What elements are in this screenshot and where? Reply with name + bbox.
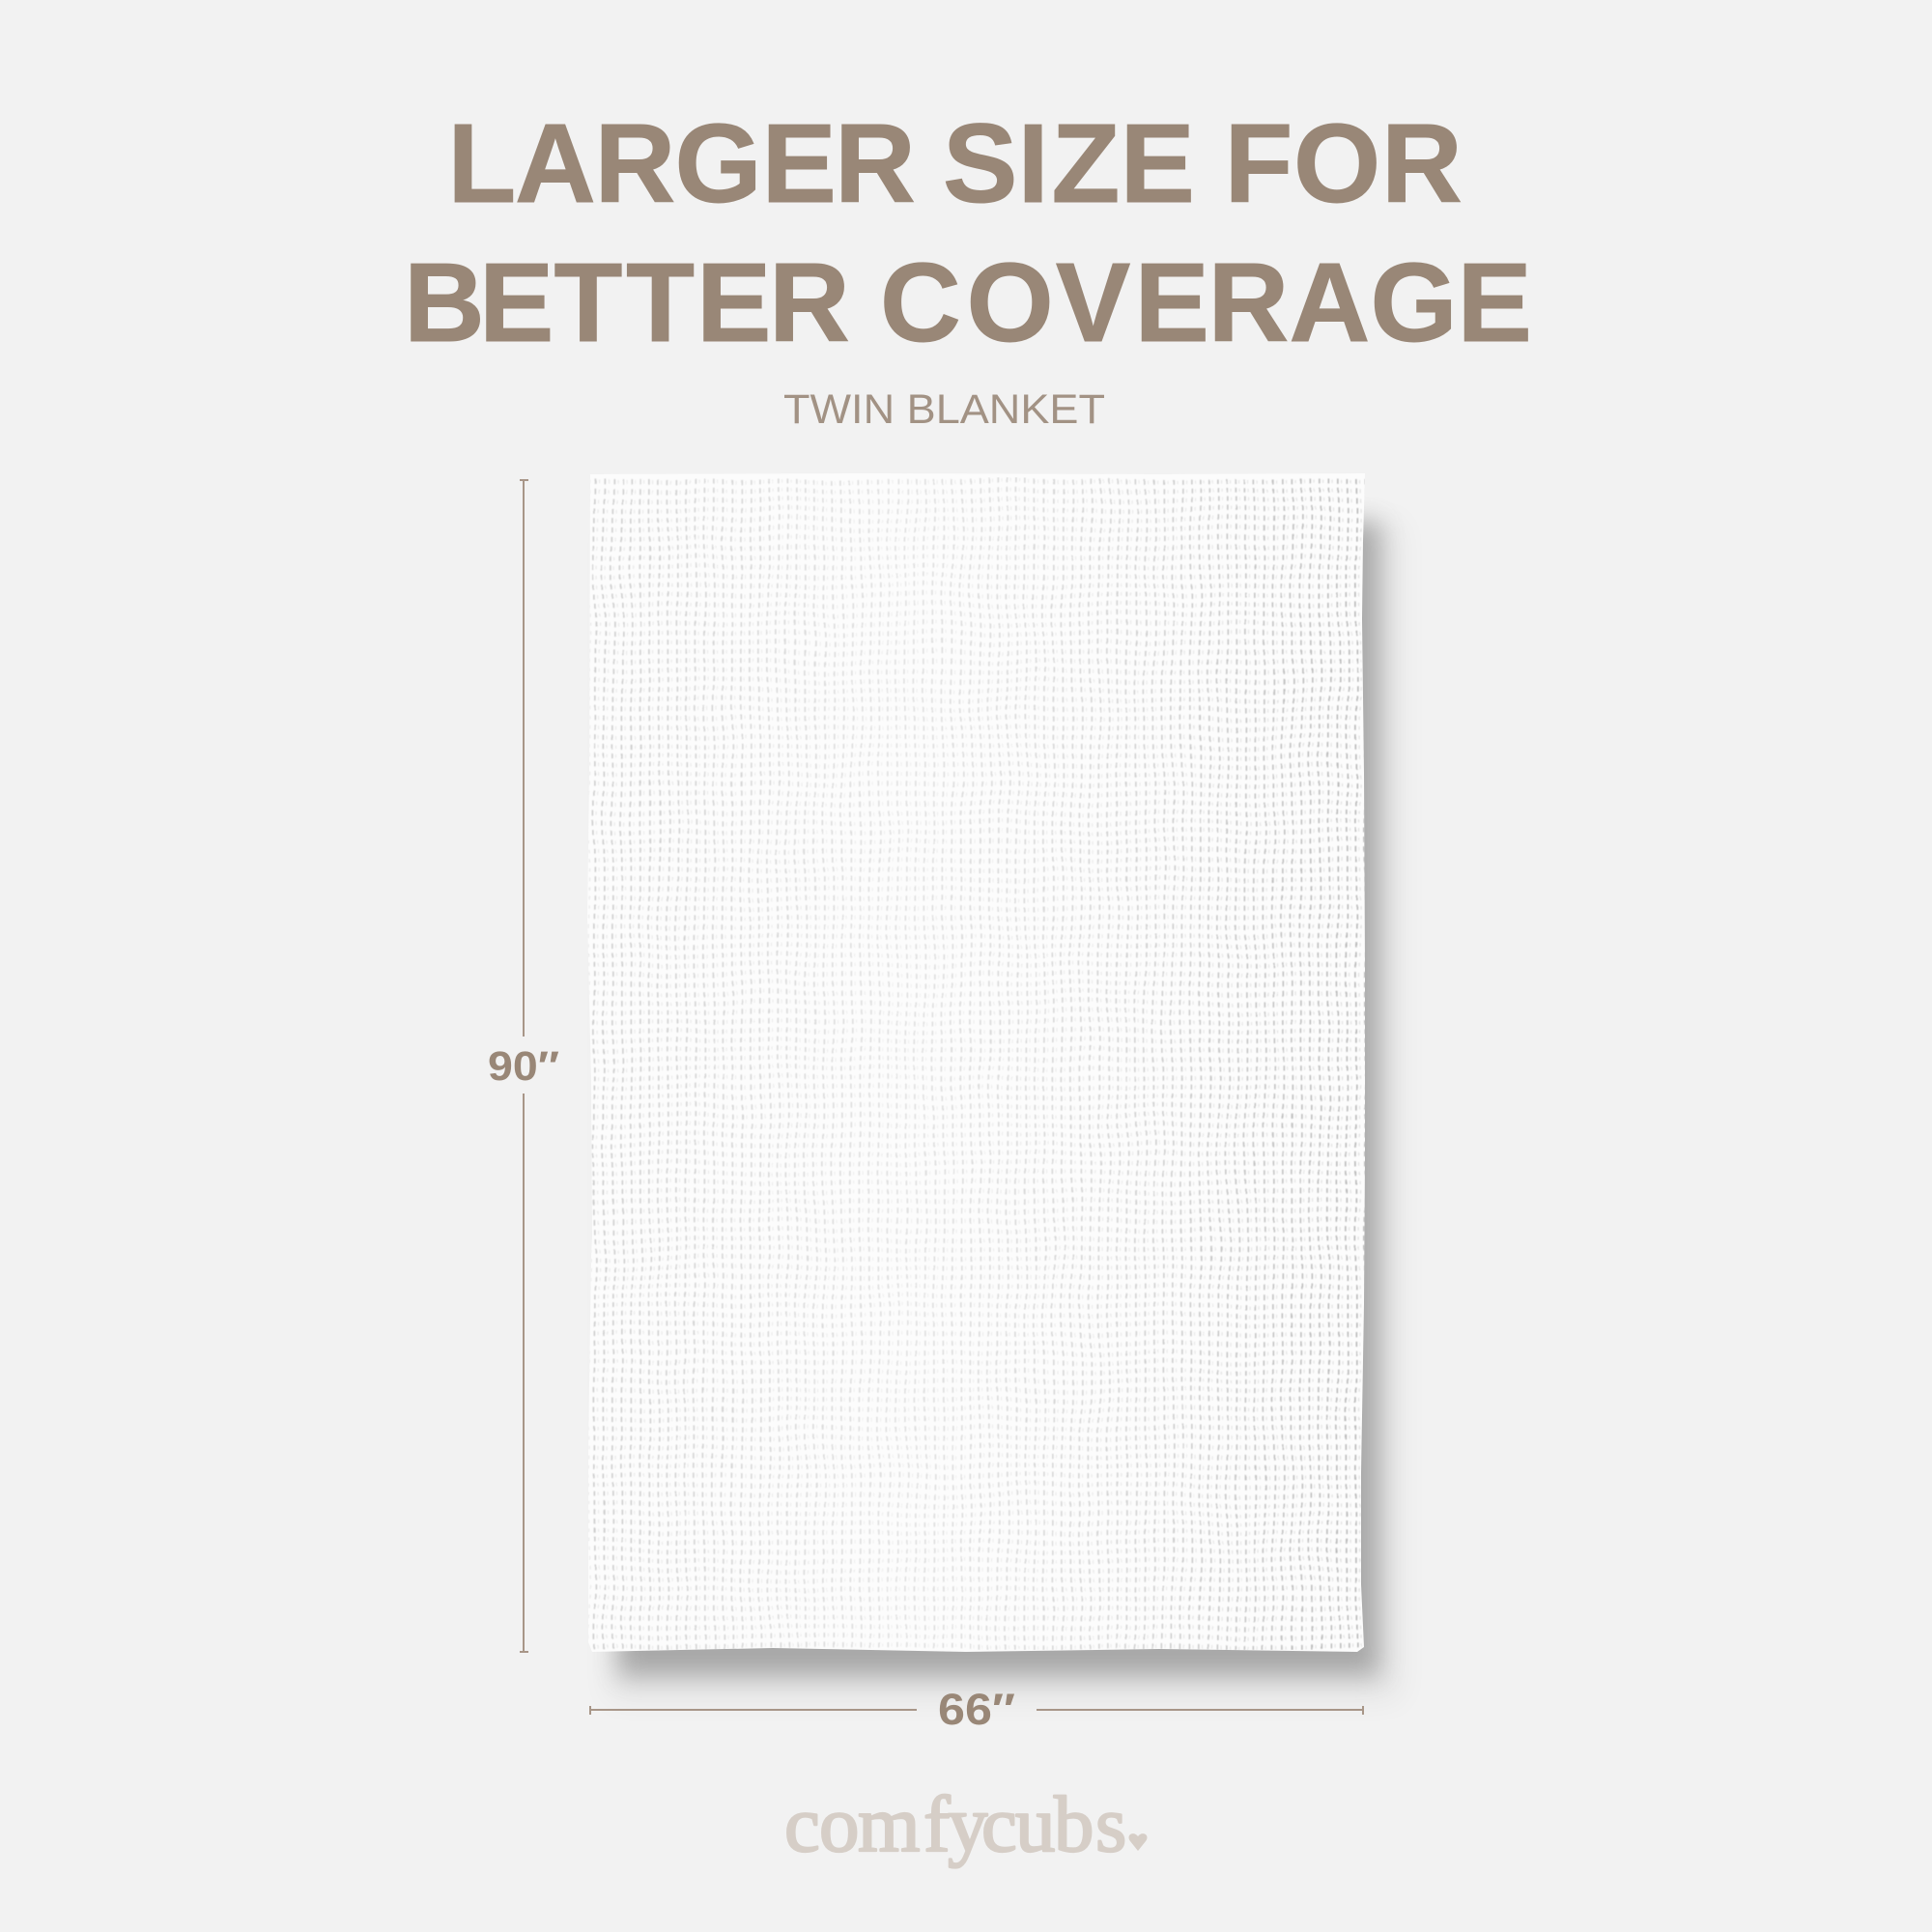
brand logo: comfycubs [784, 1779, 1126, 1868]
label: 66 inches: 66″ [938, 1685, 1015, 1734]
blanket shadow [609, 522, 1401, 1700]
height dimension: 90 inches [488, 480, 559, 1652]
title: BETTER COVERAGE [404, 240, 1532, 365]
title [404, 100, 1532, 365]
icon: heart [1129, 1833, 1147, 1851]
blanket [580, 464, 1381, 1662]
width dimension: 66 inches [590, 1685, 1363, 1734]
label: 90 inches: 90″ [488, 1043, 559, 1090]
subtitle: TWIN BLANKET [783, 386, 1105, 433]
title: LARGER SIZE FOR [447, 100, 1463, 226]
